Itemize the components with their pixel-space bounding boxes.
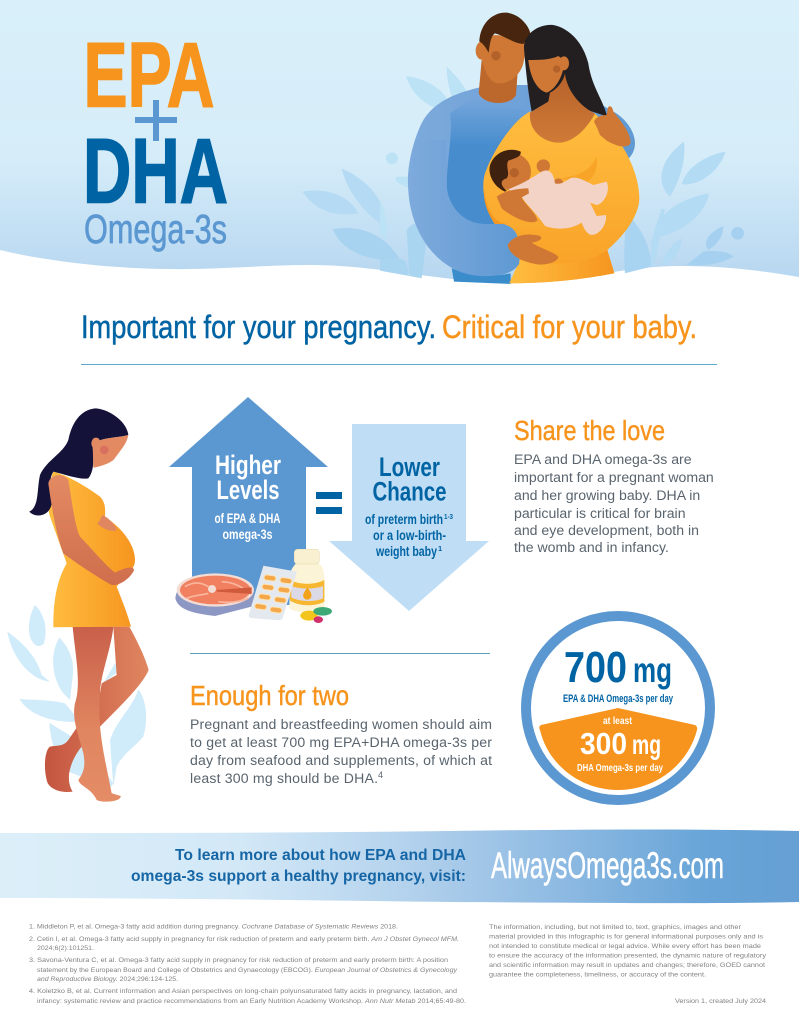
baby cheek xyxy=(510,168,519,177)
disclaimer xyxy=(489,924,767,1005)
upper hand xyxy=(97,515,117,531)
paragraph xyxy=(514,451,714,555)
man hair xyxy=(479,13,531,53)
EPA: EPA xyxy=(84,24,214,126)
disclaimer line 1: The information, including, but not limited to, text, graphics, images and other xyxy=(489,924,741,931)
line 2: important for a pregnant woman xyxy=(514,469,714,485)
woman arm holding baby xyxy=(497,188,537,222)
down arrow text xyxy=(365,452,453,559)
back leg xyxy=(45,627,149,792)
reference 4 continued: infancy: systematic review and practice recommendations from an Early Nutrition Academy Workshop. Ann Nutr Metab 2014;65:49-80. xyxy=(37,998,466,1005)
dress xyxy=(48,472,135,627)
illustration: pregnant woman xyxy=(7,408,149,802)
of preterm birth: of preterm birth xyxy=(365,511,443,527)
reference 2 continued: 2024;6(2):101251. xyxy=(37,945,94,952)
arrows section xyxy=(169,397,489,611)
line 5: and eye development, both in xyxy=(514,522,699,538)
arm xyxy=(48,475,134,585)
call to action line 1: To learn more about how EPA and DHA xyxy=(175,847,466,864)
300: 300 xyxy=(580,726,627,761)
woman face xyxy=(528,56,564,93)
salmon flesh xyxy=(180,576,251,604)
woman cheek xyxy=(553,65,560,73)
equals sign xyxy=(316,492,342,514)
down arrow xyxy=(329,424,489,611)
hair xyxy=(29,408,128,515)
bottle cap xyxy=(294,549,319,564)
disclaimer line 2: material provided in this infographic is for general informational purposes only and is xyxy=(489,934,763,940)
higher levels: Higher xyxy=(215,450,281,480)
bottle label panel xyxy=(291,586,323,601)
woman hair back xyxy=(524,25,607,117)
EPA and DHA per day: EPA & DHA Omega-3s per day xyxy=(563,693,674,705)
disclaimer line 4: to ensure the accuracy of the information presented, the dynamic nature of regulatory xyxy=(489,952,767,960)
700: 700 xyxy=(564,643,627,692)
salmon centre xyxy=(208,585,216,593)
leaves left of family xyxy=(380,67,467,278)
man lower shirt xyxy=(452,268,511,284)
man inner torso shade xyxy=(447,93,533,224)
baby head xyxy=(492,153,531,190)
face xyxy=(93,435,128,468)
cheek xyxy=(100,446,109,454)
orange segment xyxy=(539,708,697,790)
capsules xyxy=(254,575,292,613)
line 3: day from seafood and supplements, of which at xyxy=(190,752,492,768)
reference 4: 4. Koletzko B, et al. Current information and Asian perspectives on long-chain polyunsaturated fatty acids in pregnancy, lactation, and xyxy=(29,988,458,995)
baby hair xyxy=(489,150,521,192)
disclaimer line 5: and scientific information may result in updates and changes; therefore, GOED cannot xyxy=(489,962,765,969)
of EPA and DHA: of EPA & DHA xyxy=(214,510,280,526)
front leg xyxy=(73,627,121,802)
omega-3s: omega-3s xyxy=(222,526,273,542)
line 1: EPA and DHA omega-3s are xyxy=(514,451,692,467)
headline part two: Critical for your baby. xyxy=(442,309,697,345)
mg: mg xyxy=(632,729,661,760)
reference 1: 1. Middleton P, et al. Omega-3 fatty acid addition during pregnancy. Cochrane Database of Systematic Reviews 2018. xyxy=(29,924,398,930)
disclaimer line 3: not intended to constitute medical or legal advice. While every effort has been made xyxy=(489,943,762,950)
plus sign xyxy=(135,100,177,141)
lower: Lower xyxy=(379,452,440,482)
illustration: salmon, blister pack, supplement bottle xyxy=(175,549,332,623)
man hand on belly xyxy=(508,235,558,265)
line 4: least 300 mg should be DHA. xyxy=(190,770,378,786)
levels: Levels xyxy=(216,475,280,505)
reference 2: 2. Cetin I, et al. Omega-3 fatty acid supply in pregnancy for risk reduction of preterm and early preterm birth. Am J Obstet Gynecol MFM. xyxy=(29,936,459,943)
oil drop xyxy=(303,587,311,600)
line 4: particular is critical for brain xyxy=(514,505,686,521)
headline part one: Important for your pregnancy. xyxy=(81,309,436,345)
section: share the love xyxy=(514,415,714,555)
bottle label xyxy=(290,580,324,605)
man ear xyxy=(476,42,488,60)
call to action line 2: omega-3s support a healthy pregnancy, visit: xyxy=(131,868,466,885)
hand on shoulder xyxy=(594,106,631,147)
superscript 1: 1 xyxy=(438,544,442,553)
paragraph xyxy=(190,716,492,786)
line 2: to get at least 700 mg EPA+DHA omega-3s per xyxy=(190,734,492,750)
man face xyxy=(482,35,527,84)
salmon bone xyxy=(217,587,252,594)
or a low-birth-: or a low-birth- xyxy=(373,527,446,543)
mg: mg xyxy=(633,651,672,690)
dress left shadow xyxy=(484,190,520,260)
reference 3: 3. Savona-Ventura C, et al. Omega-3 fatty acid supply in pregnancy for risk reduction of preterm and early preterm birth: A position xyxy=(29,957,449,964)
leaves behind legs xyxy=(7,605,146,793)
ring xyxy=(526,616,710,800)
superscript 4: 4 xyxy=(378,770,383,780)
baby hand xyxy=(537,159,550,173)
salmon base xyxy=(175,573,254,616)
up arrow xyxy=(169,397,328,605)
line 1: Pregnant and breastfeeding women should aim xyxy=(190,716,492,732)
up arrow text xyxy=(214,450,281,542)
heading: Enough for two xyxy=(190,680,349,711)
dress fold shadow xyxy=(560,157,597,183)
man forearm xyxy=(408,140,519,276)
illustration: family with baby xyxy=(380,13,744,284)
at least: at least xyxy=(603,715,632,727)
section: enough for two xyxy=(190,680,492,786)
heading: Share the love xyxy=(514,415,665,446)
Omega-3s: Omega-3s xyxy=(84,206,227,252)
salmon rim xyxy=(177,573,254,607)
line 6: the womb and in infancy. xyxy=(514,539,669,555)
leaves right of family xyxy=(624,142,744,273)
disclaimer line 6: guarantee the completeness, timeliness, or accuracy of the content. xyxy=(489,972,706,978)
woman ear xyxy=(559,56,569,70)
softgels xyxy=(300,607,332,623)
man neck xyxy=(479,60,518,103)
DHA: DHA xyxy=(83,120,228,222)
man torso xyxy=(408,85,635,276)
ear xyxy=(91,438,101,449)
hero background with wave xyxy=(0,0,799,283)
weight baby: weight baby xyxy=(375,543,437,559)
baby foot behind blanket xyxy=(553,178,563,188)
call to action band xyxy=(0,830,799,903)
dress lower sheen xyxy=(509,250,614,283)
chance: Chance xyxy=(372,476,446,506)
salmon stripes xyxy=(185,582,248,602)
DHA per day: DHA Omega-3s per day xyxy=(577,762,663,774)
bottle body xyxy=(289,563,325,612)
reference 3 end: and Reproductive Biology. 2024;296:124-125. xyxy=(37,976,178,983)
baby blanket xyxy=(508,171,608,235)
dosage badge xyxy=(526,616,710,800)
man cheek xyxy=(491,51,501,60)
headline xyxy=(81,309,697,345)
blister pack xyxy=(250,567,296,619)
decorative leaves behind logo side xyxy=(303,154,400,260)
reference 3 continued: statement by the European Board and College of Obstetrics and Gynaecology (EBCOG). European Journal of Obstetrics & Gynecology xyxy=(37,967,458,974)
superscript 1-3: 1-3 xyxy=(444,512,453,521)
line 3: and her growing baby. DHA in xyxy=(514,487,700,503)
references xyxy=(29,924,466,1005)
woman chest xyxy=(530,73,595,143)
version note: Version 1, created July 2024 xyxy=(675,998,767,1005)
logo: EPA + DHA Omega-3s xyxy=(83,24,228,252)
woman dress xyxy=(483,112,639,283)
band shape xyxy=(0,830,799,903)
